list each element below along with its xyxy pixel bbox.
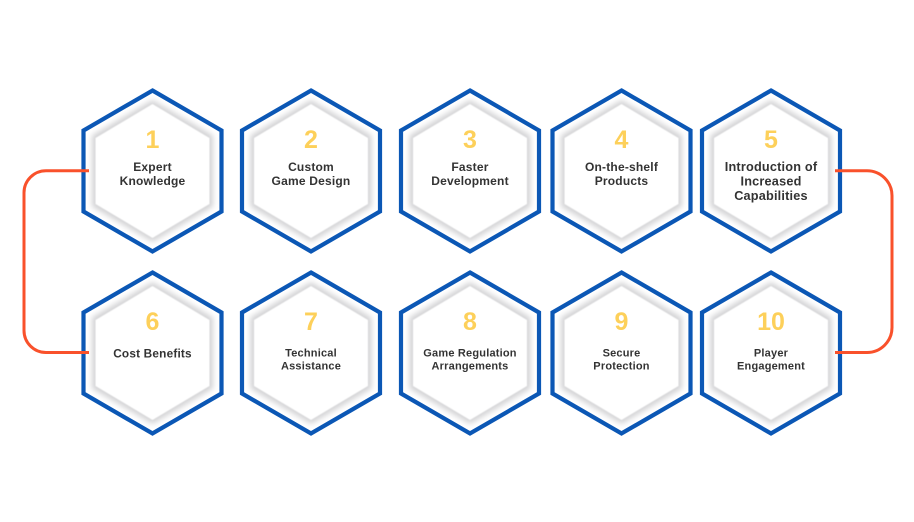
- hexagon 6: Cost Benefits: 6: [146, 308, 159, 336]
- hexagon 8: Game Regulation Arrangements: Game Regulation: [423, 348, 517, 360]
- hexagon 2: Custom Game Design: 2: [304, 126, 318, 154]
- hexagon 4: On-the-shelf Products: On-the-shelf: [585, 160, 659, 174]
- hexagon 5: Introduction of Increased Capabilities: Capabilities: [734, 189, 808, 203]
- hexagon 1: Expert Knowledge: [84, 90, 222, 252]
- hexagon 9: Secure Protection: 9: [615, 308, 628, 336]
- hexagon 2: Custom Game Design: Game Design: [272, 174, 350, 188]
- hexagon 4: On-the-shelf Products: 4: [615, 126, 629, 154]
- hexagon 9: Secure Protection: [552, 272, 690, 434]
- hexagon 3: Faster Development: [401, 90, 539, 252]
- hexagon 5: Introduction of Increased Capabilities: Introduction of: [725, 160, 818, 174]
- hexagon 8: Game Regulation Arrangements: 8: [463, 308, 477, 336]
- hexagon 8: Game Regulation Arrangements: Arrangements: [432, 360, 508, 372]
- hexagon 1: Expert Knowledge: 1: [146, 126, 160, 154]
- hexagon 10: Player Engagement: Player: [754, 348, 789, 360]
- hexagon 7: Technical Assistance: [242, 272, 380, 434]
- hexagon 2: Custom Game Design: [242, 90, 380, 252]
- hexagon 5: Introduction of Increased Capabilities: Increased: [740, 175, 802, 189]
- hexagon 9: Secure Protection: Protection: [593, 360, 650, 372]
- hexagon 7: Technical Assistance: Technical: [285, 348, 337, 360]
- hexagon 4: On-the-shelf Products: Products: [595, 174, 648, 188]
- hexagon 9: Secure Protection: Secure: [603, 348, 640, 360]
- hexagon 7: Technical Assistance: 7: [304, 308, 318, 336]
- hexagon 10: Player Engagement: Engagement: [737, 360, 805, 372]
- hexagon 10: Player Engagement: 10: [757, 308, 785, 336]
- hexagon 6: Cost Benefits: [84, 272, 222, 434]
- hexagon 1: Expert Knowledge: Knowledge: [120, 174, 186, 188]
- hexagon 1: Expert Knowledge: Expert: [133, 160, 172, 174]
- hexagon 5: Introduction of Increased Capabilities: 5: [764, 126, 778, 154]
- connector: left orange line: [24, 171, 89, 352]
- hexagon 2: Custom Game Design: Custom: [288, 160, 334, 174]
- hexagon 3: Faster Development: Development: [431, 174, 509, 188]
- hexagon 3: Faster Development: Faster: [451, 160, 489, 174]
- hexagon 7: Technical Assistance: Assistance: [281, 360, 341, 372]
- hexagon 4: On-the-shelf Products: [552, 90, 690, 252]
- hexagon 5: Introduction of Increased Capabilities: [702, 90, 840, 252]
- hexagon 3: Faster Development: 3: [463, 126, 477, 154]
- hexagon 8: Game Regulation Arrangements: [401, 272, 539, 434]
- connector: right orange line: [835, 171, 892, 352]
- hexagon 10: Player Engagement: [702, 272, 840, 434]
- hexagon 6: Cost Benefits: Cost Benefits: [113, 346, 192, 360]
